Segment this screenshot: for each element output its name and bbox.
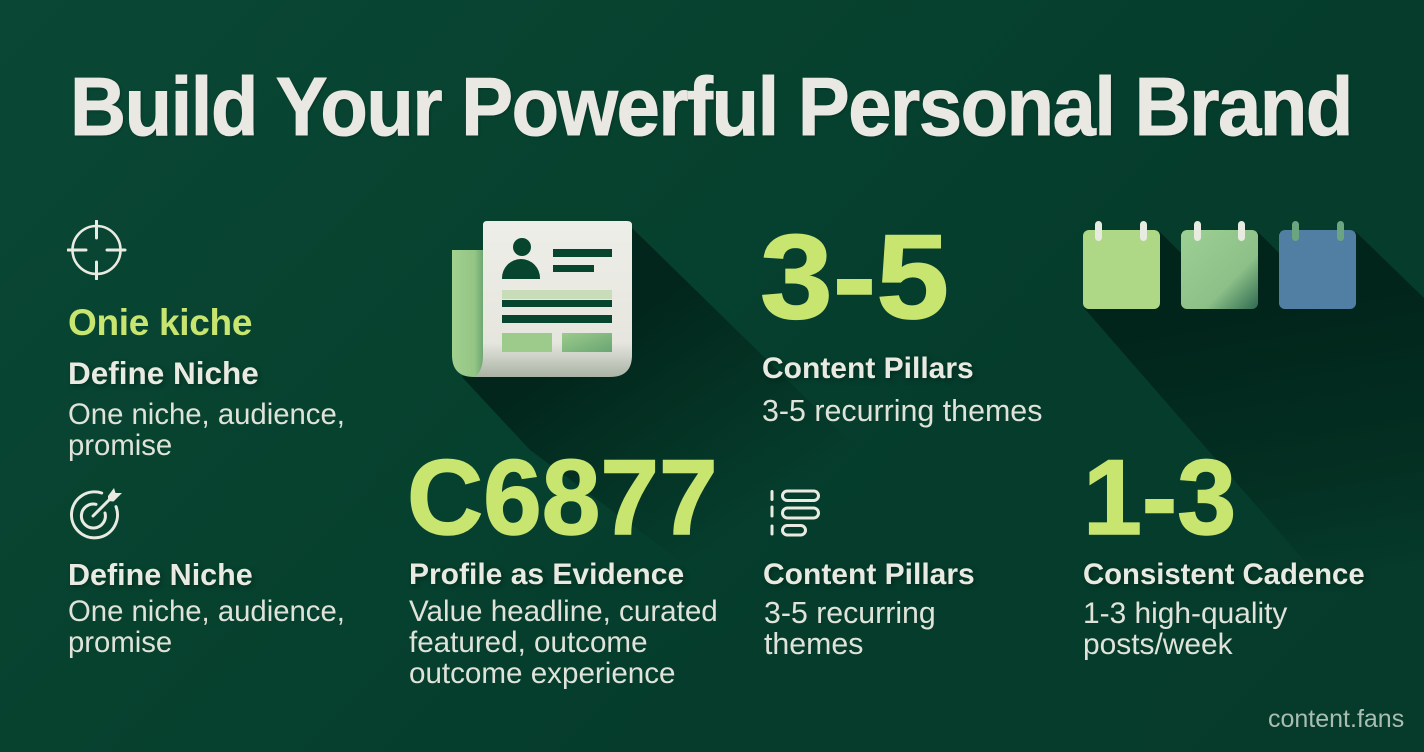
text: One niche, audience, promise: promise (68, 626, 172, 659)
heading: Consistent Cadence: Consistent Cadence (1083, 558, 1365, 591)
number: 1-3: 1-3 (1083, 437, 1236, 557)
icon: list of pills (770, 490, 820, 536)
panel: niche top (67, 220, 345, 462)
panel: niche bottom (68, 488, 345, 659)
icon: target with arrow (70, 488, 122, 540)
heading: Define Niche: Define Niche (68, 355, 259, 391)
text: One niche, audience, promise: One niche, audience, (68, 595, 345, 628)
icon: crosshair (67, 220, 126, 280)
text: One niche, audience, promise (68, 595, 345, 659)
text: One niche, audience, promise (68, 398, 345, 462)
text: profile description: Value headline, curated (409, 595, 718, 628)
text: 3-5 recurring themes top: 3-5 recurring themes (762, 394, 1042, 428)
text: One niche, audience, promise: promise (68, 429, 172, 462)
heading: Content Pillars bottom: Content Pillars (763, 558, 975, 591)
text: profile description: outcome experience (409, 657, 676, 690)
calendars long shadow (1084, 232, 1424, 640)
number: C6877: C6877 (407, 437, 718, 557)
subheading: Onie kiche: Onie kiche (68, 302, 252, 343)
watermark: content.fans (1268, 705, 1404, 733)
title: Build Your Powerful Personal Brand (70, 60, 1352, 153)
text: profile description (409, 595, 718, 690)
text: profile description: featured, outcome (409, 626, 648, 659)
text: One niche, audience, promise: One niche, audience, (68, 398, 345, 431)
number: 3-5: 3-5 (760, 210, 949, 344)
text: 1-3 posts per week: posts/week (1083, 628, 1233, 661)
heading: Define Niche: Define Niche (68, 558, 253, 592)
icon: three calendars (1083, 221, 1356, 309)
document long shadow (462, 224, 900, 620)
text: 3-5 recurring themes bottom: themes (764, 628, 863, 661)
heading: Profile as Evidence: Profile as Evidence (409, 558, 684, 591)
text: 3-5 recurring themes bottom: 3-5 recurring (764, 597, 936, 630)
text: 1-3 posts per week (1083, 597, 1288, 661)
heading: Content Pillars top: Content Pillars (762, 352, 974, 385)
text: 1-3 posts per week: 1-3 high-quality (1083, 597, 1287, 630)
icon: profile document (452, 221, 632, 377)
text: 3-5 recurring themes bottom (764, 597, 936, 661)
